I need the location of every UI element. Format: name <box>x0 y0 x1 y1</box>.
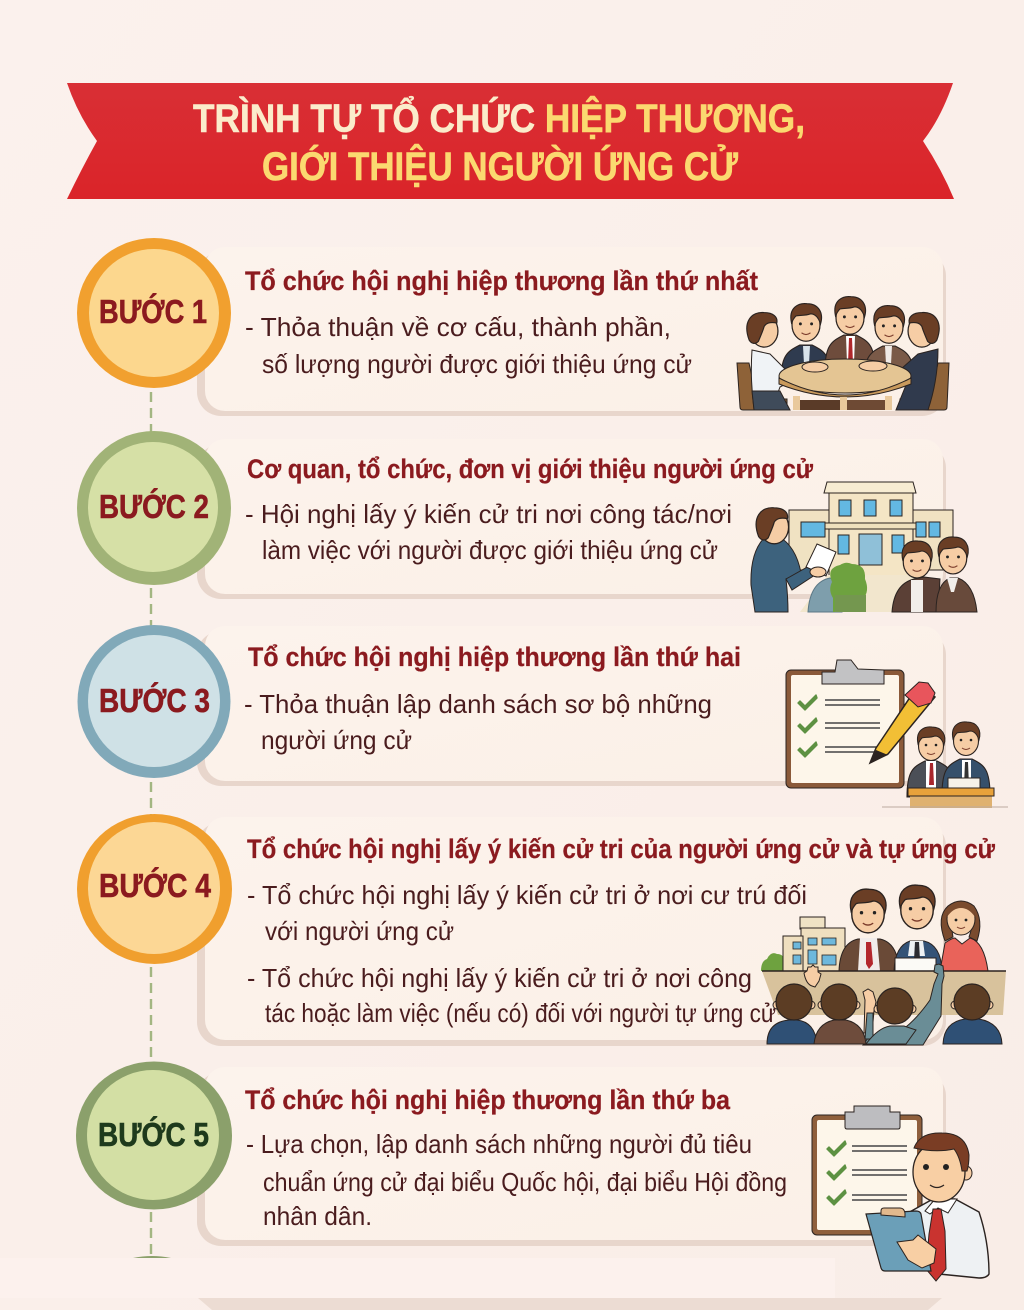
panel: step 1 <box>197 247 946 416</box>
step 3 body: - Thỏa thuận lập danh sách sơ bộ những <box>244 689 712 719</box>
badge: step 4 <box>77 814 232 964</box>
bottom page fragments <box>0 1256 942 1310</box>
badge: step 5: BƯỚC 5 <box>98 1116 209 1153</box>
step 2 body <box>245 499 732 565</box>
step 4 body: với người ứng cử <box>265 916 454 946</box>
step 5 body: - Lựa chọn, lập danh sách những người đủ tiêu <box>246 1129 752 1159</box>
badge: step 2: BƯỚC 2 <box>99 488 209 525</box>
title text: GIỚI THIỆU NGƯỜI ỨNG CỬ <box>262 143 739 189</box>
step 2 body: làm việc với người được giới thiệu ứng cử <box>262 535 718 565</box>
step 2 heading: Cơ quan, tổ chức, đơn vị giới thiệu người ứng cử <box>247 454 813 484</box>
step 2 body: - Hội nghị lấy ý kiến cử tri nơi công tác/nơi <box>245 499 732 529</box>
title text <box>193 94 805 189</box>
step 5 body: nhân dân. <box>263 1201 372 1231</box>
icon: man holding checklist <box>812 1106 989 1281</box>
timeline dashed connectors <box>150 392 152 1258</box>
badge: step 3 <box>78 625 230 778</box>
step 1 body: số lượng người được giới thiệu ứng cử <box>262 349 692 379</box>
icon: candidates meeting voters <box>761 885 1006 1045</box>
step 4 body <box>247 880 807 1028</box>
step 1 body <box>245 312 692 379</box>
step 4 body: - Tổ chức hội nghị lấy ý kiến cử tri ở nơi cư trú đối <box>247 880 807 910</box>
step 3 heading: Tổ chức hội nghị hiệp thương lần thứ hai <box>248 642 741 672</box>
badge: step 1: BƯỚC 1 <box>99 293 207 330</box>
step 5 body <box>246 1129 787 1231</box>
step 3 body <box>244 689 712 755</box>
icon: checklist clipboard with pencil <box>786 660 1008 808</box>
step 4 body: - Tổ chức hội nghị lấy ý kiến cử tri ở nơi công <box>247 963 752 993</box>
step 4 body: tác hoặc làm việc (nếu có) đối với người tự ứng cử <box>265 998 776 1028</box>
step 3 body: người ứng cử <box>261 725 412 755</box>
step 1 body: - Thỏa thuận về cơ cấu, thành phần, <box>245 312 671 342</box>
title text: TRÌNH TỰ TỔ CHỨC HIỆP THƯƠNG, <box>193 94 805 141</box>
badge: step 2 <box>77 431 231 585</box>
panel: step 3 <box>197 626 946 786</box>
icon: office building with voters <box>751 482 977 612</box>
badge: step 3: BƯỚC 3 <box>99 682 210 719</box>
step 1 heading: Tổ chức hội nghị hiệp thương lần thứ nhất <box>245 266 758 296</box>
step 5 body: chuẩn ứng cử đại biểu Quốc hội, đại biểu Hội đồng <box>263 1167 787 1197</box>
badge: step 1 <box>77 238 231 388</box>
title ribbon <box>67 83 954 199</box>
icon: people meeting around table <box>737 297 949 410</box>
badge: step 4: BƯỚC 4 <box>99 867 212 904</box>
panel: step 2 <box>197 439 946 599</box>
step 5 heading: Tổ chức hội nghị hiệp thương lần thứ ba <box>245 1085 731 1115</box>
panel: step 4 <box>197 817 995 1046</box>
badge: step 5 <box>76 1062 232 1210</box>
panel: step 5 <box>197 1067 946 1246</box>
